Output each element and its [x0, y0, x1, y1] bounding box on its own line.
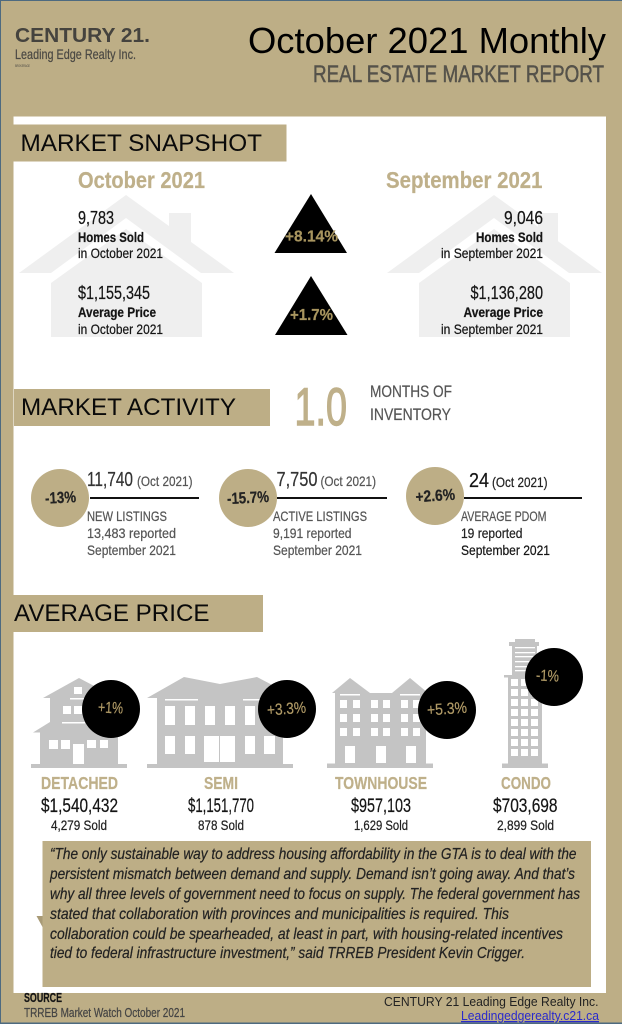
- badge: semi change: +3.3%: [266, 700, 307, 719]
- badge: detached change: [82, 680, 140, 738]
- heading: market activity: [14, 389, 270, 426]
- heading: market activity: MARKET ACTIVITY: [21, 394, 236, 421]
- triangle: homes sold change: +8.14%: [285, 228, 338, 246]
- icon: detached house: [31, 678, 127, 768]
- stat: active listings: -15.7%: [227, 489, 269, 508]
- stat: average PDOM: +2.6%: [415, 487, 456, 506]
- prices: condo: $703,698: [493, 796, 558, 817]
- stats: October 2021: 9,783: [78, 208, 114, 228]
- stats: September 2021: Average Price: [464, 305, 543, 320]
- prices: townhouse: 1,629 Sold: [354, 817, 408, 833]
- icon: condo tower: [502, 639, 548, 768]
- stats: October 2021: in October 2021: [78, 245, 163, 261]
- prices: detached: $1,540,432: [41, 796, 118, 817]
- badge: detached change: +1%: [98, 699, 123, 718]
- badge: semi change: [258, 680, 316, 738]
- heading: market snapshot: [14, 124, 286, 162]
- stat: new listings: NEW LISTINGS: [87, 508, 167, 524]
- prices: semi: $1,151,770: [188, 796, 254, 817]
- prices: condo: 2,899 Sold: [497, 817, 554, 833]
- footer: company and website: [384, 995, 599, 1023]
- stats: September 2021: in September 2021: [441, 245, 543, 261]
- stat: average PDOM: September 2021: [461, 542, 550, 558]
- heading: average price: [14, 595, 263, 632]
- icon: house right: [387, 195, 602, 337]
- stats: September 2021: in September 2021: [441, 321, 543, 337]
- heading: market snapshot: MARKET SNAPSHOT: [20, 130, 262, 157]
- badge: condo change: [525, 648, 583, 706]
- prices: detached: 4,279 Sold: [51, 817, 107, 833]
- triangle: average price change: +1.7%: [290, 307, 333, 324]
- stat: active listings: 7,750: [276, 469, 318, 491]
- prices: semi: [188, 773, 254, 833]
- badge: townhouse change: +5.3%: [426, 700, 468, 719]
- stat: active listings: 9,191 reported: [273, 525, 352, 541]
- months of inventory: MONTHS OF: [370, 382, 452, 401]
- prices: detached: DETACHED: [41, 773, 118, 793]
- column heading: September 2021: September 2021: [386, 167, 542, 193]
- prices: condo: [493, 773, 558, 833]
- stat: active listings: September 2021: [273, 542, 362, 558]
- stats: September 2021: $1,136,280: [470, 283, 543, 303]
- logo: Century 21 Leading Edge Realty: CENTURY 21.: [15, 25, 150, 47]
- heading: average price: AVERAGE PRICE: [14, 600, 210, 627]
- logo: Century 21 Leading Edge Realty: BROKERAGE: [15, 63, 30, 68]
- months of inventory: INVENTORY: [370, 405, 451, 424]
- stat: average PDOM: (Oct 2021): [492, 474, 548, 490]
- stats: October 2021: Homes Sold: [78, 230, 144, 245]
- stat: average PDOM: 24: [469, 470, 489, 492]
- stat: average PDOM: [406, 467, 582, 558]
- callout: quote: [36, 841, 591, 987]
- callout: quote: stated that collaboration with provinces and municipalities is required. This: [50, 906, 509, 923]
- stat: new listings: (Oct 2021): [137, 473, 192, 489]
- stats: October 2021: [78, 208, 163, 337]
- icon: semi house: [147, 677, 297, 768]
- stat: new listings: 11,740: [87, 469, 133, 491]
- badge: condo change: -1%: [536, 667, 559, 686]
- stat: average PDOM: 19 reported: [461, 525, 522, 541]
- prices: detached: [41, 773, 118, 833]
- prices: semi: 878 Sold: [198, 817, 244, 833]
- stat: new listings: [31, 469, 199, 558]
- stat: average PDOM: AVERAGE PDOM: [461, 508, 546, 524]
- prices: townhouse: [335, 773, 427, 833]
- stats: September 2021: 9,046: [504, 208, 543, 228]
- logo: Century 21 Leading Edge Realty: [15, 25, 150, 68]
- prices: townhouse: $957,103: [351, 796, 411, 817]
- stat: active listings: [219, 469, 387, 558]
- logo: Century 21 Leading Edge Realty: Leading Edge Realty Inc.: [15, 46, 136, 62]
- source: [24, 990, 185, 1020]
- stats: September 2021: [441, 208, 543, 337]
- months of inventory: [294, 378, 452, 437]
- footer: company and website: CENTURY 21 Leading Edge Realty Inc.: [384, 995, 598, 1009]
- source: SOURCE: [24, 990, 62, 1005]
- stat: new listings: September 2021: [87, 542, 176, 558]
- prices: townhouse: TOWNHOUSE: [335, 773, 427, 793]
- months of inventory: 1.0: [294, 378, 347, 437]
- stats: October 2021: $1,155,345: [78, 283, 150, 303]
- stats: September 2021: Homes Sold: [476, 230, 543, 245]
- column heading: October 2021: October 2021: [78, 167, 205, 193]
- prices: semi: SEMI: [204, 773, 238, 793]
- footer: company and website: Leadingedgerealty.c21.ca: [461, 1009, 599, 1023]
- triangle: homes sold change: [274, 194, 347, 253]
- stat: new listings: -13%: [45, 489, 76, 508]
- icon: townhouse: [327, 678, 433, 768]
- icon: house left: [19, 195, 234, 337]
- triangle: average price change: [275, 276, 348, 335]
- stat: active listings: ACTIVE LISTINGS: [273, 508, 367, 524]
- stats: October 2021: in October 2021: [78, 321, 163, 337]
- badge: townhouse change: [418, 681, 476, 739]
- stats: October 2021: Average Price: [78, 305, 156, 320]
- callout: quote: tied to federal infrastructure investment,” said TRREB President Kevin Crigger.: [50, 945, 525, 962]
- stat: new listings: 13,483 reported: [87, 525, 176, 541]
- stat: active listings: (Oct 2021): [320, 473, 376, 489]
- source: TRREB Market Watch October 2021: [24, 1005, 185, 1020]
- title: October 2021 Monthly: [248, 20, 606, 61]
- prices: condo: CONDO: [501, 773, 551, 793]
